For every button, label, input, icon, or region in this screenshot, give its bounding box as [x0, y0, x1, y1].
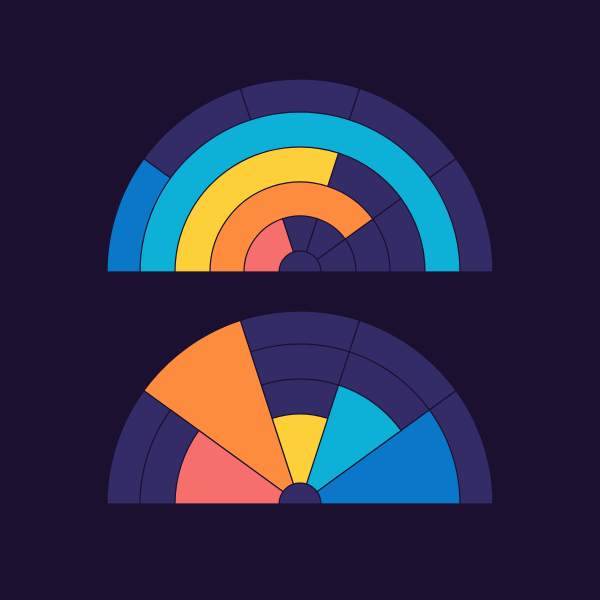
ring 5 pink — [244, 216, 356, 272]
layer r125 — [175, 379, 401, 504]
ring 1 outer — [107, 79, 493, 272]
wedge yellow — [272, 414, 328, 504]
layer r160 — [140, 344, 460, 504]
chart: top concentric semicircle rings — [107, 79, 493, 272]
hub bottom — [279, 483, 321, 504]
chart: bottom radial wedge semicircle — [107, 311, 493, 504]
outer layer — [107, 311, 493, 504]
hub top — [279, 251, 321, 272]
ring 3 yellow — [175, 147, 425, 272]
ring 2 light blue — [140, 112, 460, 272]
ring 4 orange — [210, 182, 390, 272]
